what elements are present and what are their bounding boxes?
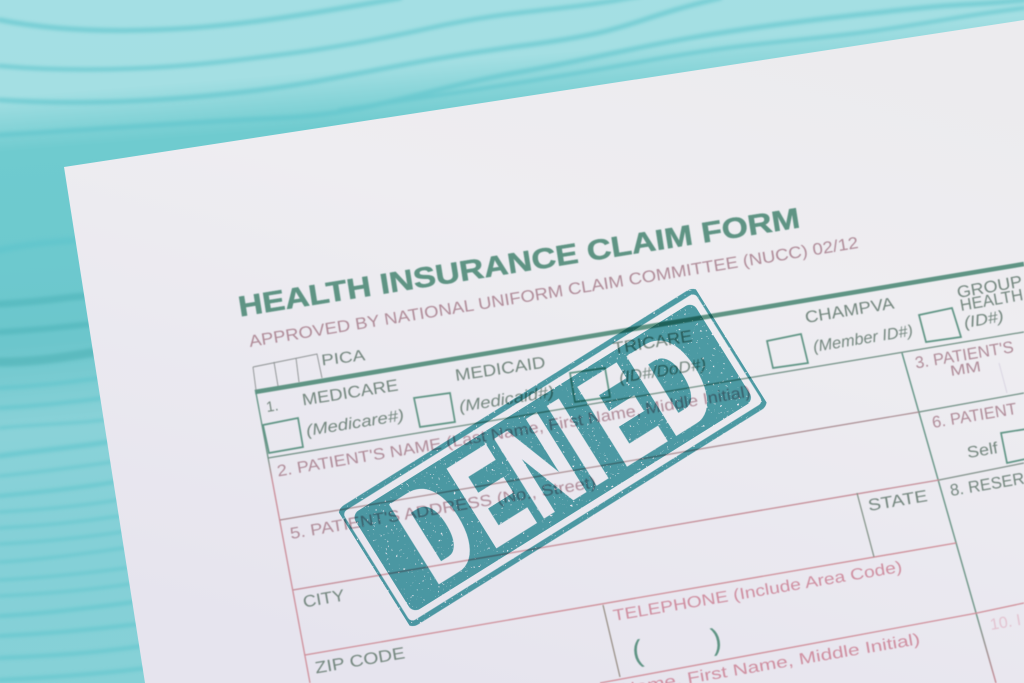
stamp solid fill — [352, 302, 754, 613]
form labels: MM — [949, 359, 982, 380]
form labels: 5. PATIENT'S ADDRESS (No., Street) — [289, 474, 597, 543]
form labels: (ID#/DoD#) — [618, 356, 708, 387]
form labels: HEALTH — [959, 286, 1024, 315]
form labels: 8. RESER — [949, 470, 1024, 500]
form labels: ZIP CODE — [314, 644, 406, 677]
form labels: (Member ID#) — [812, 323, 914, 356]
form subtitle: APPROVED BY NATIONAL UNIFORM CLAIM COMMITTEE (NUCC) 02/12 — [248, 234, 860, 351]
form labels: PICA — [320, 347, 367, 369]
form grid lines — [253, 264, 1024, 683]
form labels: 6. PATIENT — [931, 400, 1018, 432]
form labels: ( — [630, 635, 645, 669]
DENIED stamp — [336, 284, 771, 632]
form labels: MEDICARE — [301, 376, 399, 409]
form labels: CHAMPVA — [804, 294, 895, 327]
form labels: GROUP — [956, 273, 1024, 302]
form labels: TRICARE — [612, 327, 694, 358]
form labels: Self — [966, 440, 1000, 462]
form labels: MEDICAID — [454, 354, 547, 385]
form labels: STATE — [867, 487, 929, 515]
form labels: (ID#) — [963, 308, 1005, 332]
form labels — [265, 273, 1024, 683]
form labels: 10. I — [989, 612, 1022, 634]
checkboxes — [263, 308, 1024, 463]
form labels: (Medicare#) — [305, 407, 405, 440]
form labels: CITY — [302, 587, 346, 611]
stamp word: DENIED — [372, 306, 737, 609]
form labels: TELEPHONE (Include Area Code) — [612, 559, 903, 625]
stamp outer border — [338, 289, 767, 626]
form labels: 2. PATIENT'S NAME (Last Name, First Name, Middle Initial) — [276, 384, 752, 480]
form labels: (Medicaid#) — [458, 384, 555, 416]
form labels: 1. — [265, 398, 280, 416]
form title: HEALTH INSURANCE CLAIM FORM — [236, 202, 802, 323]
form labels: 3. PATIENT'S — [914, 338, 1015, 372]
form labels: ) — [709, 623, 724, 657]
